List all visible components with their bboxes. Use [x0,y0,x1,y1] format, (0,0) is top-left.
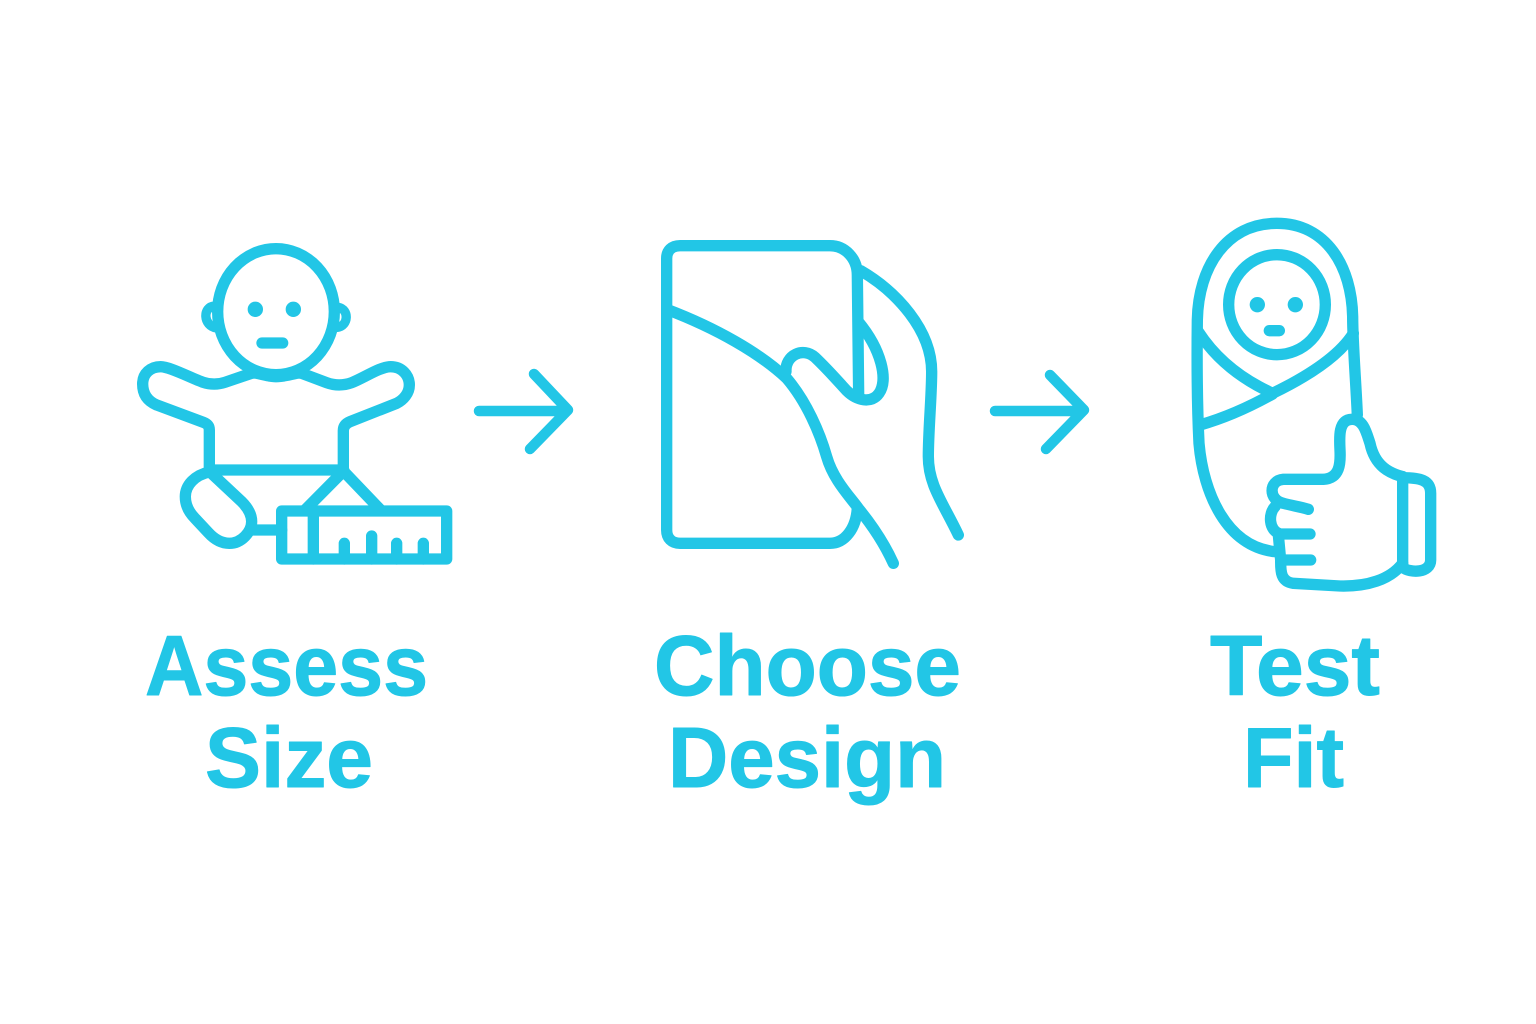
cloth fold and palm edge [667,309,893,563]
label: Choose Design: Design [668,711,946,806]
back of hand [861,271,958,535]
thumb [786,322,883,400]
arrow: assess to choose [479,374,568,449]
baby ears [206,306,346,328]
swaddle outline [1197,223,1357,552]
label: Assess Size: Assess [145,619,428,714]
baby face ring [1229,255,1325,355]
icon: swaddled baby with thumbs up [1197,223,1431,586]
label: Assess Size: Size [205,711,373,806]
baby head [218,249,334,375]
baby body and arms [143,367,409,470]
label: Test Fit: Fit [1243,711,1344,806]
baby face [1250,297,1303,331]
thumbs up hand [1270,419,1403,586]
icon: baby with measuring ruler [143,249,447,559]
baby leg [185,472,252,543]
thumbs up cuff [1403,477,1431,571]
ruler [253,511,447,559]
swaddle folds [1198,332,1353,425]
label: Test Fit: Test [1210,619,1380,714]
cloth outline [667,246,859,543]
arrow: choose to test [995,375,1084,449]
label: Choose Design: Choose [654,619,961,714]
baby face [248,302,301,343]
label: Test Fit [1210,619,1380,806]
label: Choose Design [654,619,961,806]
diaper straps [305,471,381,510]
icon: hand holding swaddle cloth [667,246,958,563]
label: Assess Size [145,619,428,806]
